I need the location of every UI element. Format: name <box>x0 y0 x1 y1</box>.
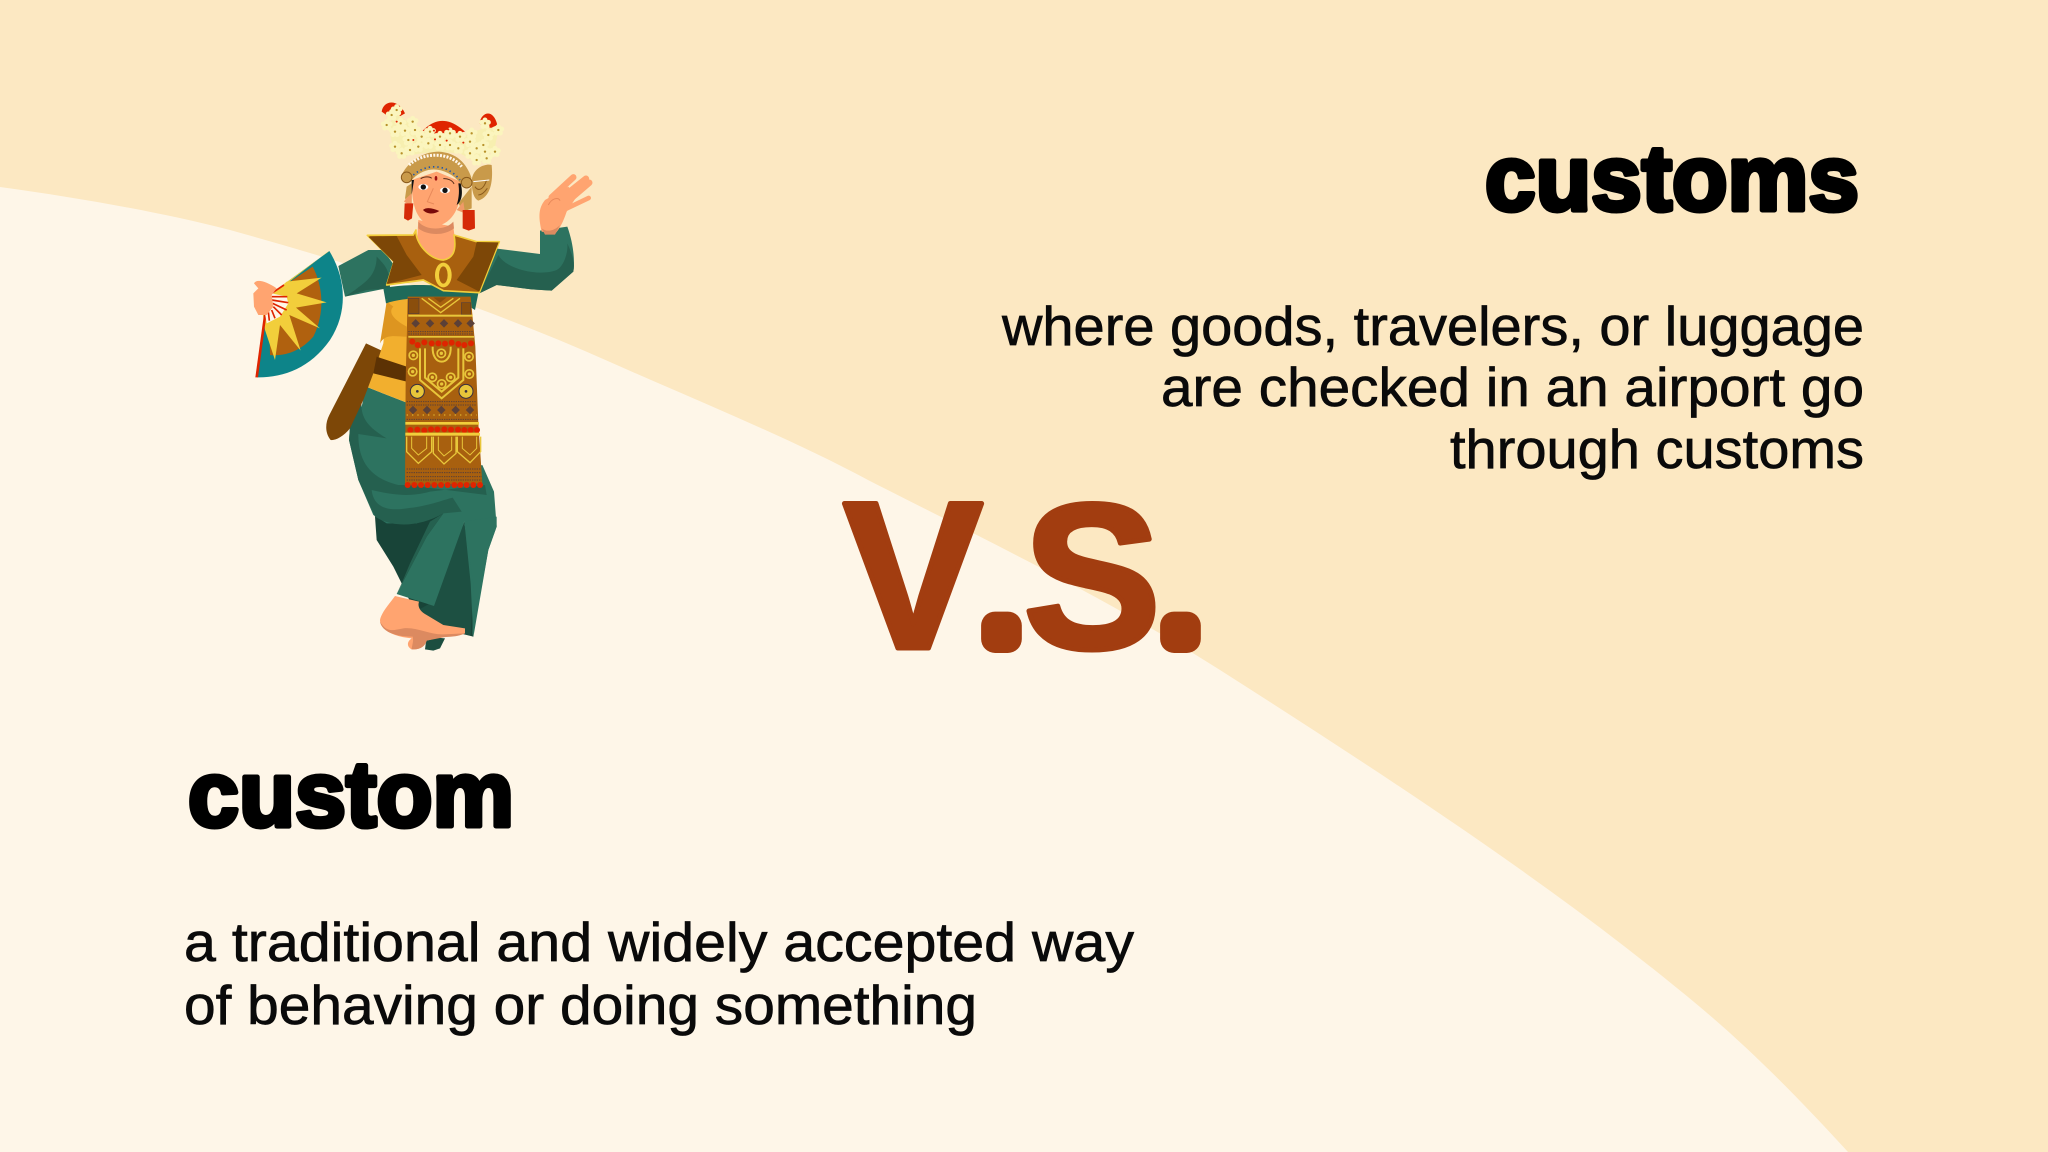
text: customs definition: where goods, travelers, or luggage <box>1001 295 1864 357</box>
text: custom definition: of behaving or doing something <box>184 974 977 1036</box>
text: custom definition: a traditional and widely accepted way <box>184 911 1135 973</box>
dancer hand raised <box>539 177 589 235</box>
illustration: Balinese dancer <box>253 102 589 651</box>
heading: V.S.: S <box>1023 461 1161 692</box>
heading: V.S.: V <box>843 458 983 693</box>
dancer skirt and lower body <box>349 370 497 651</box>
dancer foot <box>380 596 465 649</box>
dancer torso <box>373 285 478 400</box>
heading: custom: custom <box>188 742 514 846</box>
background: cream curved area <box>0 187 1848 1152</box>
dancer arms <box>338 227 574 297</box>
text: customs definition: through customs <box>1450 418 1864 480</box>
text: customs definition: are checked in an airport go <box>1161 356 1864 418</box>
dancer head and headdress <box>381 102 504 231</box>
dancer sash <box>326 343 384 440</box>
dancer fan <box>253 251 343 377</box>
text: customs definition <box>1001 295 1864 480</box>
text: custom definition <box>184 911 1135 1036</box>
heading: V.S.: . <box>1168 559 1193 659</box>
dancer apron panel <box>405 297 483 488</box>
dancer collar <box>367 220 499 293</box>
heading: V.S.: . <box>989 559 1014 659</box>
heading: customs: customs <box>1485 126 1859 230</box>
heading: V.S. <box>843 458 1193 693</box>
